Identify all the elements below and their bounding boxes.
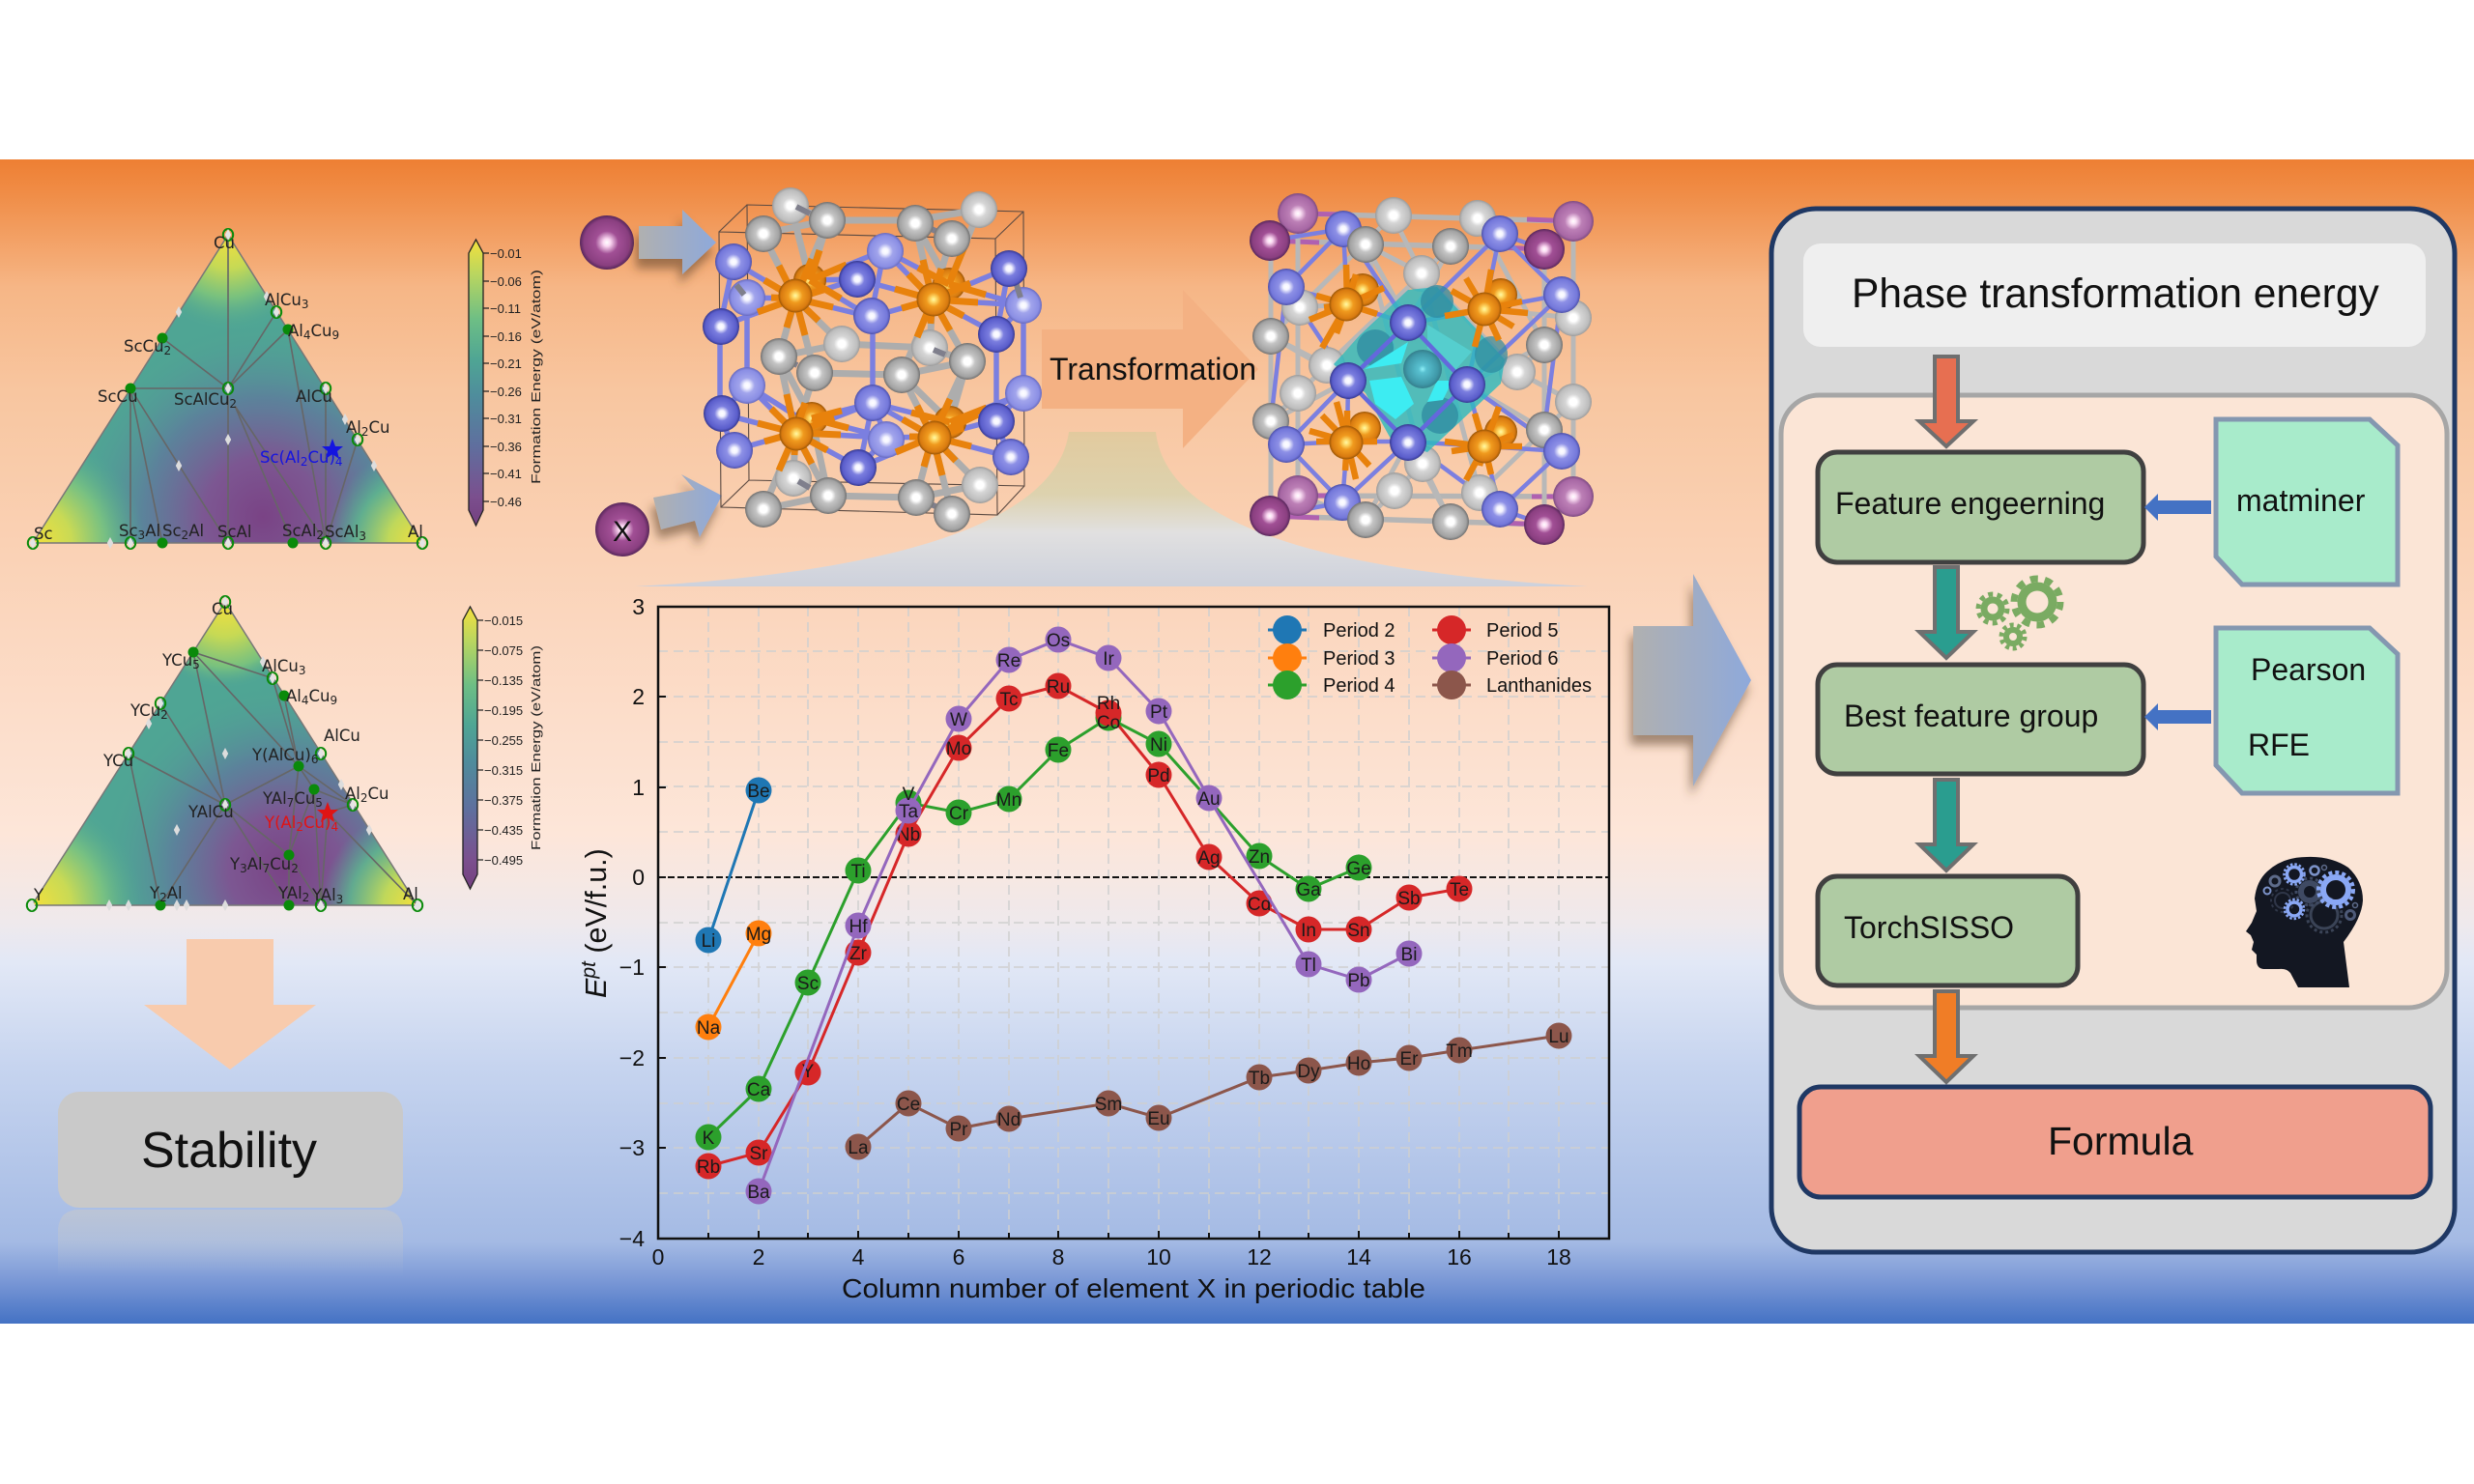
series: Period 5: Pd xyxy=(1147,766,1170,786)
phase labels: ScAl xyxy=(217,523,251,541)
phase labels: Cu) xyxy=(303,813,331,832)
phase labels: AlCu xyxy=(296,387,332,406)
series: Period 4: Sc xyxy=(797,974,819,994)
series: Period 4: Ti xyxy=(850,862,866,882)
phase labels: Cu xyxy=(294,789,315,808)
colorbar 2: Formation Energy (eV/atom) xyxy=(529,645,543,850)
series: Period 6: Pb xyxy=(1347,971,1370,991)
y tick labels xyxy=(619,594,645,1251)
overlapping labels V, Rh, Co xyxy=(903,694,1120,805)
box: Feature engeerning: Feature engeerning xyxy=(1835,486,2105,521)
y tick labels: −1 xyxy=(619,955,645,980)
series: Period 4: Fe xyxy=(1048,741,1069,761)
y axis title: (eV/f.u.) xyxy=(580,848,613,961)
phase labels: 4 xyxy=(303,328,311,342)
series: Period 5: Te xyxy=(1450,880,1469,900)
phase labels: 2 xyxy=(291,862,299,875)
funnel linking crystal to chart xyxy=(635,432,1588,586)
series: Period 3: Na xyxy=(697,1018,721,1039)
phase labels: YCu xyxy=(102,752,133,770)
star: Sc(Al2Cu)4 xyxy=(322,439,343,459)
colorbar 1: −0.46 xyxy=(490,495,522,509)
series: Lanthanides: Nd xyxy=(997,1110,1021,1130)
phase labels: 2 xyxy=(301,455,307,469)
box: Formula: Formula xyxy=(2048,1119,2194,1163)
legend: Lanthanides xyxy=(1486,675,1592,697)
phase labels: 2 xyxy=(316,528,324,542)
series: Period 4: Ga xyxy=(1296,880,1321,900)
arrow: orange down xyxy=(1919,991,1973,1082)
phase labels: 2 xyxy=(160,708,168,722)
phase labels: Cu) xyxy=(307,448,335,467)
y axis title: pt xyxy=(578,960,600,980)
arrow: sphere into structure xyxy=(639,210,716,274)
arrow: transformation: Transformation xyxy=(1050,352,1256,386)
phase labels: 2 xyxy=(229,397,237,411)
series: Lanthanides: Tm xyxy=(1446,1042,1473,1062)
arrow: X into structure xyxy=(653,474,722,537)
series: Lanthanides: Ce xyxy=(897,1095,920,1115)
phase labels: 3 xyxy=(359,529,366,543)
ternary surface Y-Al-Cu xyxy=(32,602,417,905)
series: Period 6: Tl xyxy=(1301,956,1316,976)
phase labels: 3 xyxy=(138,528,145,542)
colorbar 1: −0.06 xyxy=(490,274,522,289)
series: Period 5: Rb xyxy=(697,1157,720,1178)
series: Period 5: In xyxy=(1301,921,1316,941)
series: Period 6: Ta xyxy=(899,802,918,822)
colorbar 1: −0.36 xyxy=(490,440,522,454)
series: Period 6: Ba xyxy=(747,1183,770,1203)
arrow: red down xyxy=(1919,357,1973,446)
phase labels: ScCu xyxy=(124,337,164,356)
phase labels: ScAl xyxy=(282,522,316,540)
x tick labels: 12 xyxy=(1247,1244,1272,1270)
phase labels xyxy=(34,234,423,543)
colorbar 2: −0.375 xyxy=(484,793,523,808)
x tick labels: 6 xyxy=(953,1244,964,1270)
phase labels: Y xyxy=(150,884,159,902)
phase labels: Cu xyxy=(369,418,390,437)
series: Lanthanides: Lu xyxy=(1548,1027,1569,1047)
overlapping labels V, Rh, Co: Co xyxy=(1097,713,1120,733)
x tick labels: 2 xyxy=(753,1244,764,1270)
icon: gears xyxy=(1978,579,2060,648)
phase labels: AlCu xyxy=(324,727,360,745)
colorbar 1: −0.26 xyxy=(490,385,522,399)
box: Stability: Stability xyxy=(141,1123,317,1179)
phase labels: 2 xyxy=(360,791,368,805)
y tick labels: −2 xyxy=(619,1045,645,1070)
phase labels: 3 xyxy=(336,893,343,906)
colorbar 1: −0.21 xyxy=(490,357,522,371)
overlapping labels V, Rh, Co: Rh xyxy=(1097,694,1120,714)
legend: Period 4 xyxy=(1323,675,1395,697)
grid xyxy=(658,607,1609,1239)
phase labels: 2 xyxy=(361,425,369,439)
colorbar 2: −0.435 xyxy=(484,823,523,838)
colorbar 2: −0.075 xyxy=(484,643,523,658)
box: Pearson and RFE: Pearson xyxy=(2251,652,2366,687)
y tick labels: 0 xyxy=(632,865,645,890)
series: Lanthanides: Eu xyxy=(1147,1109,1170,1129)
phase labels: YCu xyxy=(162,651,192,670)
phase labels: Sc xyxy=(162,522,182,540)
x tick labels: 8 xyxy=(1052,1244,1064,1270)
phase labels xyxy=(33,600,418,906)
colorbar 2 xyxy=(463,607,543,889)
phase labels: Al xyxy=(247,855,263,873)
colorbar 2: −0.015 xyxy=(484,614,523,628)
phase labels: ScAlCu xyxy=(174,390,229,409)
series: Lanthanides xyxy=(845,1022,1571,1159)
series: Period 6: Pt xyxy=(1150,702,1168,723)
crystal structure after transformation xyxy=(1250,193,1594,545)
box: Stability xyxy=(58,1092,403,1208)
front atoms xyxy=(809,202,846,239)
phase labels: AlCu xyxy=(265,291,302,309)
series: Period 4: Cr xyxy=(949,804,969,824)
phase labels: 2 xyxy=(296,820,303,834)
y tick labels: 3 xyxy=(632,594,645,619)
phase labels: Sc(Al xyxy=(260,448,301,467)
legend: Period 2 xyxy=(1323,620,1395,642)
phase labels: 9 xyxy=(331,694,337,707)
zero line xyxy=(658,876,1609,878)
box: matminer xyxy=(2216,419,2398,585)
series: Lanthanides: Sm xyxy=(1095,1095,1122,1115)
legend: Period 5 xyxy=(1486,620,1558,642)
series: Lanthanides: Tb xyxy=(1249,1069,1270,1089)
series: Lanthanides: Dy xyxy=(1297,1062,1320,1082)
y tick labels: 2 xyxy=(632,684,645,709)
series: Period 6: Hf xyxy=(849,917,868,937)
x tick labels: 16 xyxy=(1447,1244,1472,1270)
tie lines xyxy=(130,235,358,543)
phase labels: 5 xyxy=(315,796,323,810)
panel background xyxy=(1771,209,2455,1252)
back atoms xyxy=(729,187,1042,503)
arrow: matminer to feature engineering xyxy=(2144,494,2211,521)
arrow: chart to workflow xyxy=(1633,574,1751,786)
series: Period 5 xyxy=(696,672,1473,1179)
arrow: down to stability xyxy=(144,939,316,1070)
phase point markers xyxy=(28,229,427,549)
phase labels: 2 xyxy=(182,528,188,542)
phase labels: Al xyxy=(345,785,360,803)
box: Best feature group: Best feature group xyxy=(1844,699,2098,733)
phase labels: Cu xyxy=(309,687,331,705)
phase labels: Sc xyxy=(119,522,138,540)
phase point markers xyxy=(27,596,422,911)
phase labels: 2 xyxy=(159,891,167,904)
phase labels: Al xyxy=(188,522,204,540)
series: Period 6: Re xyxy=(997,651,1021,671)
box: TorchSISSO: TorchSISSO xyxy=(1844,910,2014,945)
series: Period 3: Mg xyxy=(746,925,771,945)
legend xyxy=(1268,615,1592,699)
panel: ternary phase diagram Y-Al-Cu xyxy=(27,596,422,911)
phase labels: 2 xyxy=(302,891,309,904)
box: Pearson and RFE: RFE xyxy=(2248,728,2310,762)
phase labels: 4 xyxy=(302,694,309,707)
arrow: teal down 1 xyxy=(1919,567,1973,658)
series: Lanthanides: La xyxy=(848,1138,869,1158)
x tick labels: 14 xyxy=(1346,1244,1371,1270)
series: Period 6 xyxy=(746,626,1423,1204)
series: Period 4: Zn xyxy=(1249,847,1270,868)
panel: machine learning workflow xyxy=(1771,209,2455,1252)
y tick labels: −3 xyxy=(619,1135,645,1160)
axes frame xyxy=(658,607,1609,1239)
phase labels: YCu xyxy=(130,701,160,720)
box: matminer: matminer xyxy=(2236,483,2366,518)
colorbar 1: Formation Energy (eV/atom) xyxy=(529,270,543,484)
series: Period 4 xyxy=(696,705,1372,1150)
tie lines xyxy=(129,652,417,905)
y axis title: E xyxy=(580,978,613,998)
series: Period 5: Zr xyxy=(849,944,868,964)
dark bond stubs xyxy=(731,207,1021,506)
colorbar 1: −0.41 xyxy=(490,467,522,481)
y tick labels: 1 xyxy=(632,775,645,800)
phase labels: Cu xyxy=(212,600,233,618)
phase labels: Sc xyxy=(34,525,53,543)
box: Best feature group xyxy=(1818,665,2143,774)
box: TorchSISSO xyxy=(1818,876,2078,985)
x tick labels: 0 xyxy=(652,1244,664,1270)
background gradient band xyxy=(0,159,2474,1324)
arrow: transformation xyxy=(1042,290,1258,448)
icon: head with gears xyxy=(2246,857,2363,987)
box: Pearson and RFE xyxy=(2216,628,2398,793)
x axis title: Column number of element X in periodic table xyxy=(842,1273,1425,1303)
series: Period 4: Ni xyxy=(1150,735,1167,756)
ternary surface Sc-Al-Cu xyxy=(33,235,422,543)
phase labels: Al xyxy=(346,418,361,437)
series: Period 2 xyxy=(696,777,771,953)
phase labels: 2 xyxy=(164,344,171,357)
phase labels: Al xyxy=(288,322,303,340)
line chart: phase transformation energy xyxy=(578,594,1609,1303)
series: Period 4: K xyxy=(703,1128,715,1149)
colorbar 2: −0.135 xyxy=(484,673,523,688)
phase labels: Cu xyxy=(214,234,235,252)
phase labels: Al xyxy=(145,522,160,540)
series: Lanthanides: Er xyxy=(1399,1049,1419,1070)
colorbar 2: −0.255 xyxy=(484,733,523,748)
phase labels: Y xyxy=(230,855,240,873)
series: Period 5: Sb xyxy=(1397,889,1421,909)
series: Period 3 xyxy=(696,920,771,1040)
colorbar 1: −0.31 xyxy=(490,412,522,426)
series: Lanthanides: Ho xyxy=(1347,1054,1370,1074)
box: Formula xyxy=(1799,1087,2431,1197)
phase labels: YAl xyxy=(263,789,287,808)
phase labels: 3 xyxy=(240,862,247,875)
phase labels: Al xyxy=(403,885,418,903)
phase labels: Cu xyxy=(311,322,332,340)
colorbar 2: −0.315 xyxy=(484,763,523,778)
phase labels: ScAl xyxy=(325,523,359,541)
series: Period 2: Li xyxy=(702,931,715,952)
phase labels: 9 xyxy=(332,328,339,342)
series: Period 6: Au xyxy=(1197,789,1221,810)
back atoms xyxy=(1278,193,1594,517)
phase labels: ScCu xyxy=(98,387,138,406)
phase labels: Al xyxy=(408,523,423,541)
series: Period 6: Ir xyxy=(1103,649,1114,670)
phase labels: Al xyxy=(167,884,183,902)
series: Period 5: Mo xyxy=(946,739,971,759)
colorbar 1 xyxy=(469,240,543,526)
stability reflection xyxy=(58,1210,403,1275)
atom: X: X xyxy=(613,516,632,548)
phase labels: YAl xyxy=(278,884,302,902)
phase labels: 7 xyxy=(287,796,294,810)
x tick labels: 4 xyxy=(852,1244,865,1270)
box: Feature engeerning xyxy=(1818,452,2143,562)
cyan polyhedron xyxy=(1334,285,1508,452)
colorbar 1: −0.01 xyxy=(490,246,522,261)
colorbar 2: −0.195 xyxy=(484,703,523,718)
series: Period 6: Bi xyxy=(1401,945,1417,965)
phase labels: YAlCu xyxy=(187,803,234,821)
series: Period 4: Ca xyxy=(747,1080,771,1100)
inner workflow panel xyxy=(1781,395,2447,1008)
x tick labels: 18 xyxy=(1546,1244,1571,1270)
phase labels: Y(AlCu) xyxy=(252,746,311,764)
series: Period 4: Ge xyxy=(1346,859,1371,879)
series: Period 5: Nb xyxy=(897,825,920,845)
box: Phase transformation energy xyxy=(1803,243,2426,347)
series: Period 5: Y xyxy=(802,1062,815,1082)
star: Y(Al2Cu)4 xyxy=(317,802,338,822)
phase labels: AlCu xyxy=(262,657,299,675)
crystal structure before transformation xyxy=(703,187,1042,532)
series: Period 6: Os xyxy=(1047,631,1070,651)
colorbar 2: −0.495 xyxy=(484,853,523,868)
box: Phase transformation energy: Phase transformation energy xyxy=(1852,271,2379,317)
phase labels: Cu xyxy=(270,855,291,873)
arrow: teal down 2 xyxy=(1919,780,1973,870)
x tick labels: 10 xyxy=(1146,1244,1171,1270)
series: Period 5: Cd xyxy=(1248,895,1271,915)
phase labels: Y(Al xyxy=(265,813,296,832)
phase labels: Al xyxy=(286,687,302,705)
x tick labels xyxy=(652,1244,1571,1270)
phase labels: 5 xyxy=(192,658,200,671)
phase labels: YAl xyxy=(312,886,336,904)
phase labels: 3 xyxy=(302,298,309,311)
series: Period 5: Tc xyxy=(999,690,1019,710)
orange half bonds xyxy=(758,246,987,475)
phase labels: 7 xyxy=(263,862,270,875)
phase labels: 4 xyxy=(335,455,343,469)
panel: ternary phase diagram Sc-Al-Cu xyxy=(28,229,427,549)
central atom xyxy=(1403,350,1442,388)
series: Period 4: Mn xyxy=(996,790,1021,811)
series: Period 5: Ag xyxy=(1197,848,1221,869)
phase labels: 6 xyxy=(311,753,318,766)
phase labels: 4 xyxy=(331,820,338,834)
series: Period 6: W xyxy=(950,710,967,730)
series: Lanthanides: Pr xyxy=(949,1120,968,1140)
atom: X xyxy=(595,502,649,556)
series: Period 5: Ru xyxy=(1047,677,1070,698)
series: Period 5: Sn xyxy=(1347,921,1370,941)
arrow: Pearson RFE to best feature group xyxy=(2144,703,2211,730)
phase labels: Y xyxy=(33,886,44,904)
colorbar 1: −0.11 xyxy=(490,301,521,316)
series: Period 2: Be xyxy=(747,782,770,802)
legend: Period 3 xyxy=(1323,648,1395,670)
y tick labels: −4 xyxy=(619,1226,645,1251)
front atoms xyxy=(1325,211,1362,247)
legend: Period 6 xyxy=(1486,648,1558,670)
colorbar 1: −0.16 xyxy=(490,329,522,344)
series: Period 5: Sr xyxy=(750,1144,768,1164)
phase labels: 3 xyxy=(299,664,305,677)
overlapping labels V, Rh, Co: V xyxy=(903,785,915,805)
axis ticks xyxy=(658,607,1559,1239)
phase labels: Cu xyxy=(368,785,388,803)
atom: free sphere xyxy=(580,215,634,270)
